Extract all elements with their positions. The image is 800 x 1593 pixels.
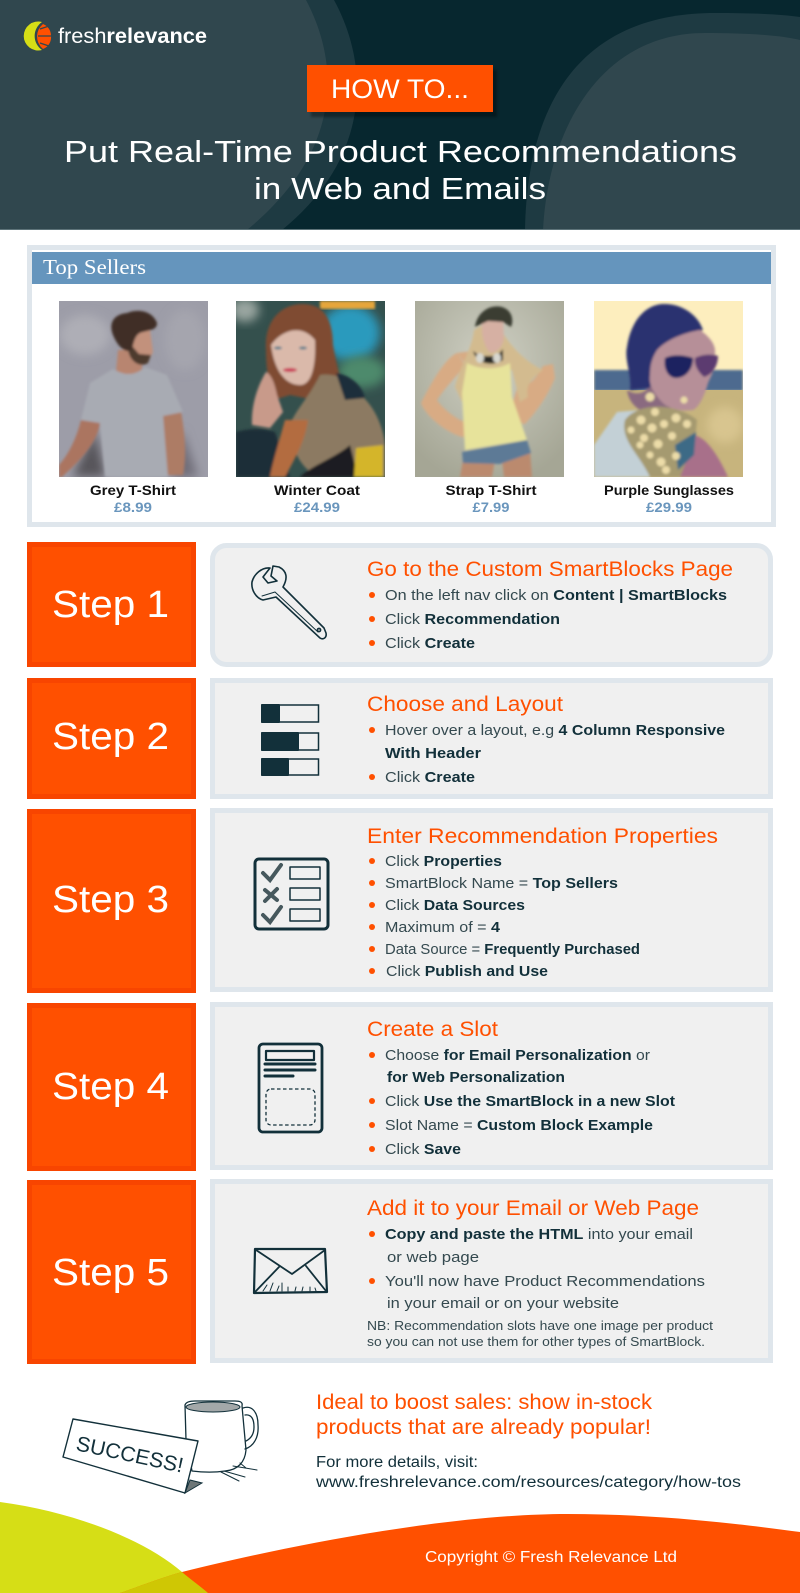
heading: Go to the Custom SmartBlocks Page (367, 557, 733, 581)
note (367, 1318, 713, 1349)
footer shape: overlap (120, 1572, 208, 1593)
product name and price (446, 483, 537, 515)
product name and price: Grey T-Shirt (90, 483, 177, 498)
product name and price: £29.99 (646, 499, 692, 515)
instruction list: Click Create (385, 769, 475, 786)
step 3 box (30, 812, 194, 990)
heading: Add it to your Email or Web Page (367, 1196, 699, 1220)
product name and price (90, 483, 177, 515)
product name and price: £24.99 (294, 499, 340, 515)
instruction list: SmartBlock Name = Top Sellers (385, 875, 618, 892)
product name and price (604, 483, 734, 515)
icon: wrench (252, 566, 326, 639)
how to badge: HOW TO... (331, 74, 469, 104)
instruction list (369, 722, 725, 786)
mug (185, 1401, 258, 1481)
instruction list: for Web Personalization (387, 1069, 565, 1086)
top sellers header bar: Top Sellers (43, 255, 146, 279)
instruction list (369, 1047, 675, 1158)
product name and price: Strap T-Shirt (446, 483, 537, 498)
closing message (316, 1390, 652, 1439)
instruction list: On the left nav click on Content | SmartBlocks (385, 587, 727, 604)
stand shadow (185, 1480, 202, 1493)
step 2 box (30, 680, 194, 796)
header banner (0, 0, 800, 230)
note: so you can not use them for other types of SmartBlock. (367, 1334, 705, 1349)
step 5 box: Step 5 (52, 1252, 169, 1294)
step 4 box: Step 4 (52, 1066, 169, 1108)
more details link (315, 1454, 741, 1491)
instruction list: Click Properties (385, 853, 502, 870)
instruction list: in your email or on your website (387, 1295, 619, 1312)
title: in Web and Emails (254, 171, 546, 206)
product: strap t-shirt (415, 301, 564, 515)
closing message: products that are already popular! (316, 1415, 651, 1439)
instruction list: Choose for Email Personalization or (385, 1047, 650, 1064)
instruction list: Click Publish and Use (386, 963, 548, 980)
step 1 box: Step 1 (52, 584, 169, 626)
panel: step 3 recommendation properties (212, 810, 770, 990)
top sellers header bar (32, 252, 771, 284)
instruction list: Maximum of = 4 (385, 919, 501, 936)
more details link: www.freshrelevance.com/resources/category/how-tos (315, 1474, 741, 1491)
heading: Choose and Layout (367, 692, 563, 716)
step 2 box: Step 2 (52, 716, 169, 758)
instruction list: With Header (385, 745, 481, 762)
copyright: Copyright © Fresh Relevance Ltd (425, 1549, 677, 1566)
product name and price: Purple Sunglasses (604, 483, 734, 498)
success card (63, 1419, 198, 1493)
step 4 box (30, 1006, 194, 1168)
panel: step 2 choose layout (212, 680, 770, 796)
instruction list (369, 1226, 705, 1312)
product: grey t-shirt (59, 301, 208, 515)
instruction list: Data Source = Frequently Purchased (385, 941, 640, 958)
icon: checklist (255, 859, 328, 929)
heading: Create a Slot (367, 1017, 498, 1041)
icon: layout bars (261, 704, 318, 776)
footer shape: orange curve (120, 1514, 800, 1593)
closing message: Ideal to boost sales: show in-stock (316, 1390, 652, 1414)
instruction list: Click Use the SmartBlock in a new Slot (385, 1093, 675, 1110)
icon: envelope (254, 1249, 327, 1293)
instruction list: or web page (387, 1249, 479, 1266)
product name and price: £8.99 (114, 499, 152, 515)
logo: fresh relevance: freshrelevance (58, 25, 207, 48)
panel: step 1 go to smartblocks (212, 546, 770, 664)
instruction list (369, 587, 727, 652)
product: winter coat (231, 298, 386, 515)
how to badge (307, 65, 497, 117)
step 5 box (30, 1182, 194, 1362)
step 1 box (30, 544, 194, 664)
instruction list: Click Data Sources (385, 897, 525, 914)
product name and price: £7.99 (472, 499, 510, 515)
icon: document (259, 1044, 322, 1132)
panel: top sellers product block (30, 248, 774, 524)
instruction list: Click Create (385, 635, 475, 652)
instruction list (369, 853, 640, 980)
panel: step 5 add to email or web page (212, 1182, 770, 1360)
product name and price (274, 483, 361, 515)
product: purple sunglasses (594, 301, 743, 515)
footer shape: green curve (0, 1502, 208, 1593)
success card: SUCCESS! (74, 1432, 185, 1478)
instruction list: You'll now have Product Recommendations (385, 1273, 705, 1290)
note: NB: Recommendation slots have one image per product (367, 1318, 713, 1333)
instruction list: Slot Name = Custom Block Example (385, 1117, 653, 1134)
instruction list: Click Save (385, 1141, 461, 1158)
instruction list: Hover over a layout, e.g 4 Column Responsive (385, 722, 725, 739)
product name and price: Winter Coat (274, 483, 361, 498)
instruction list: Copy and paste the HTML into your email (385, 1226, 693, 1243)
more details link: For more details, visit: (316, 1454, 478, 1471)
title: Put Real-Time Product Recommendations (64, 134, 737, 169)
illustration: success card and mug (63, 1401, 258, 1493)
title (64, 134, 737, 206)
instruction list: Click Recommendation (385, 611, 560, 628)
step 3 box: Step 3 (52, 879, 169, 921)
panel: step 4 create slot (212, 1004, 770, 1168)
heading: Enter Recommendation Properties (367, 824, 718, 848)
logo: fresh relevance (24, 22, 207, 50)
